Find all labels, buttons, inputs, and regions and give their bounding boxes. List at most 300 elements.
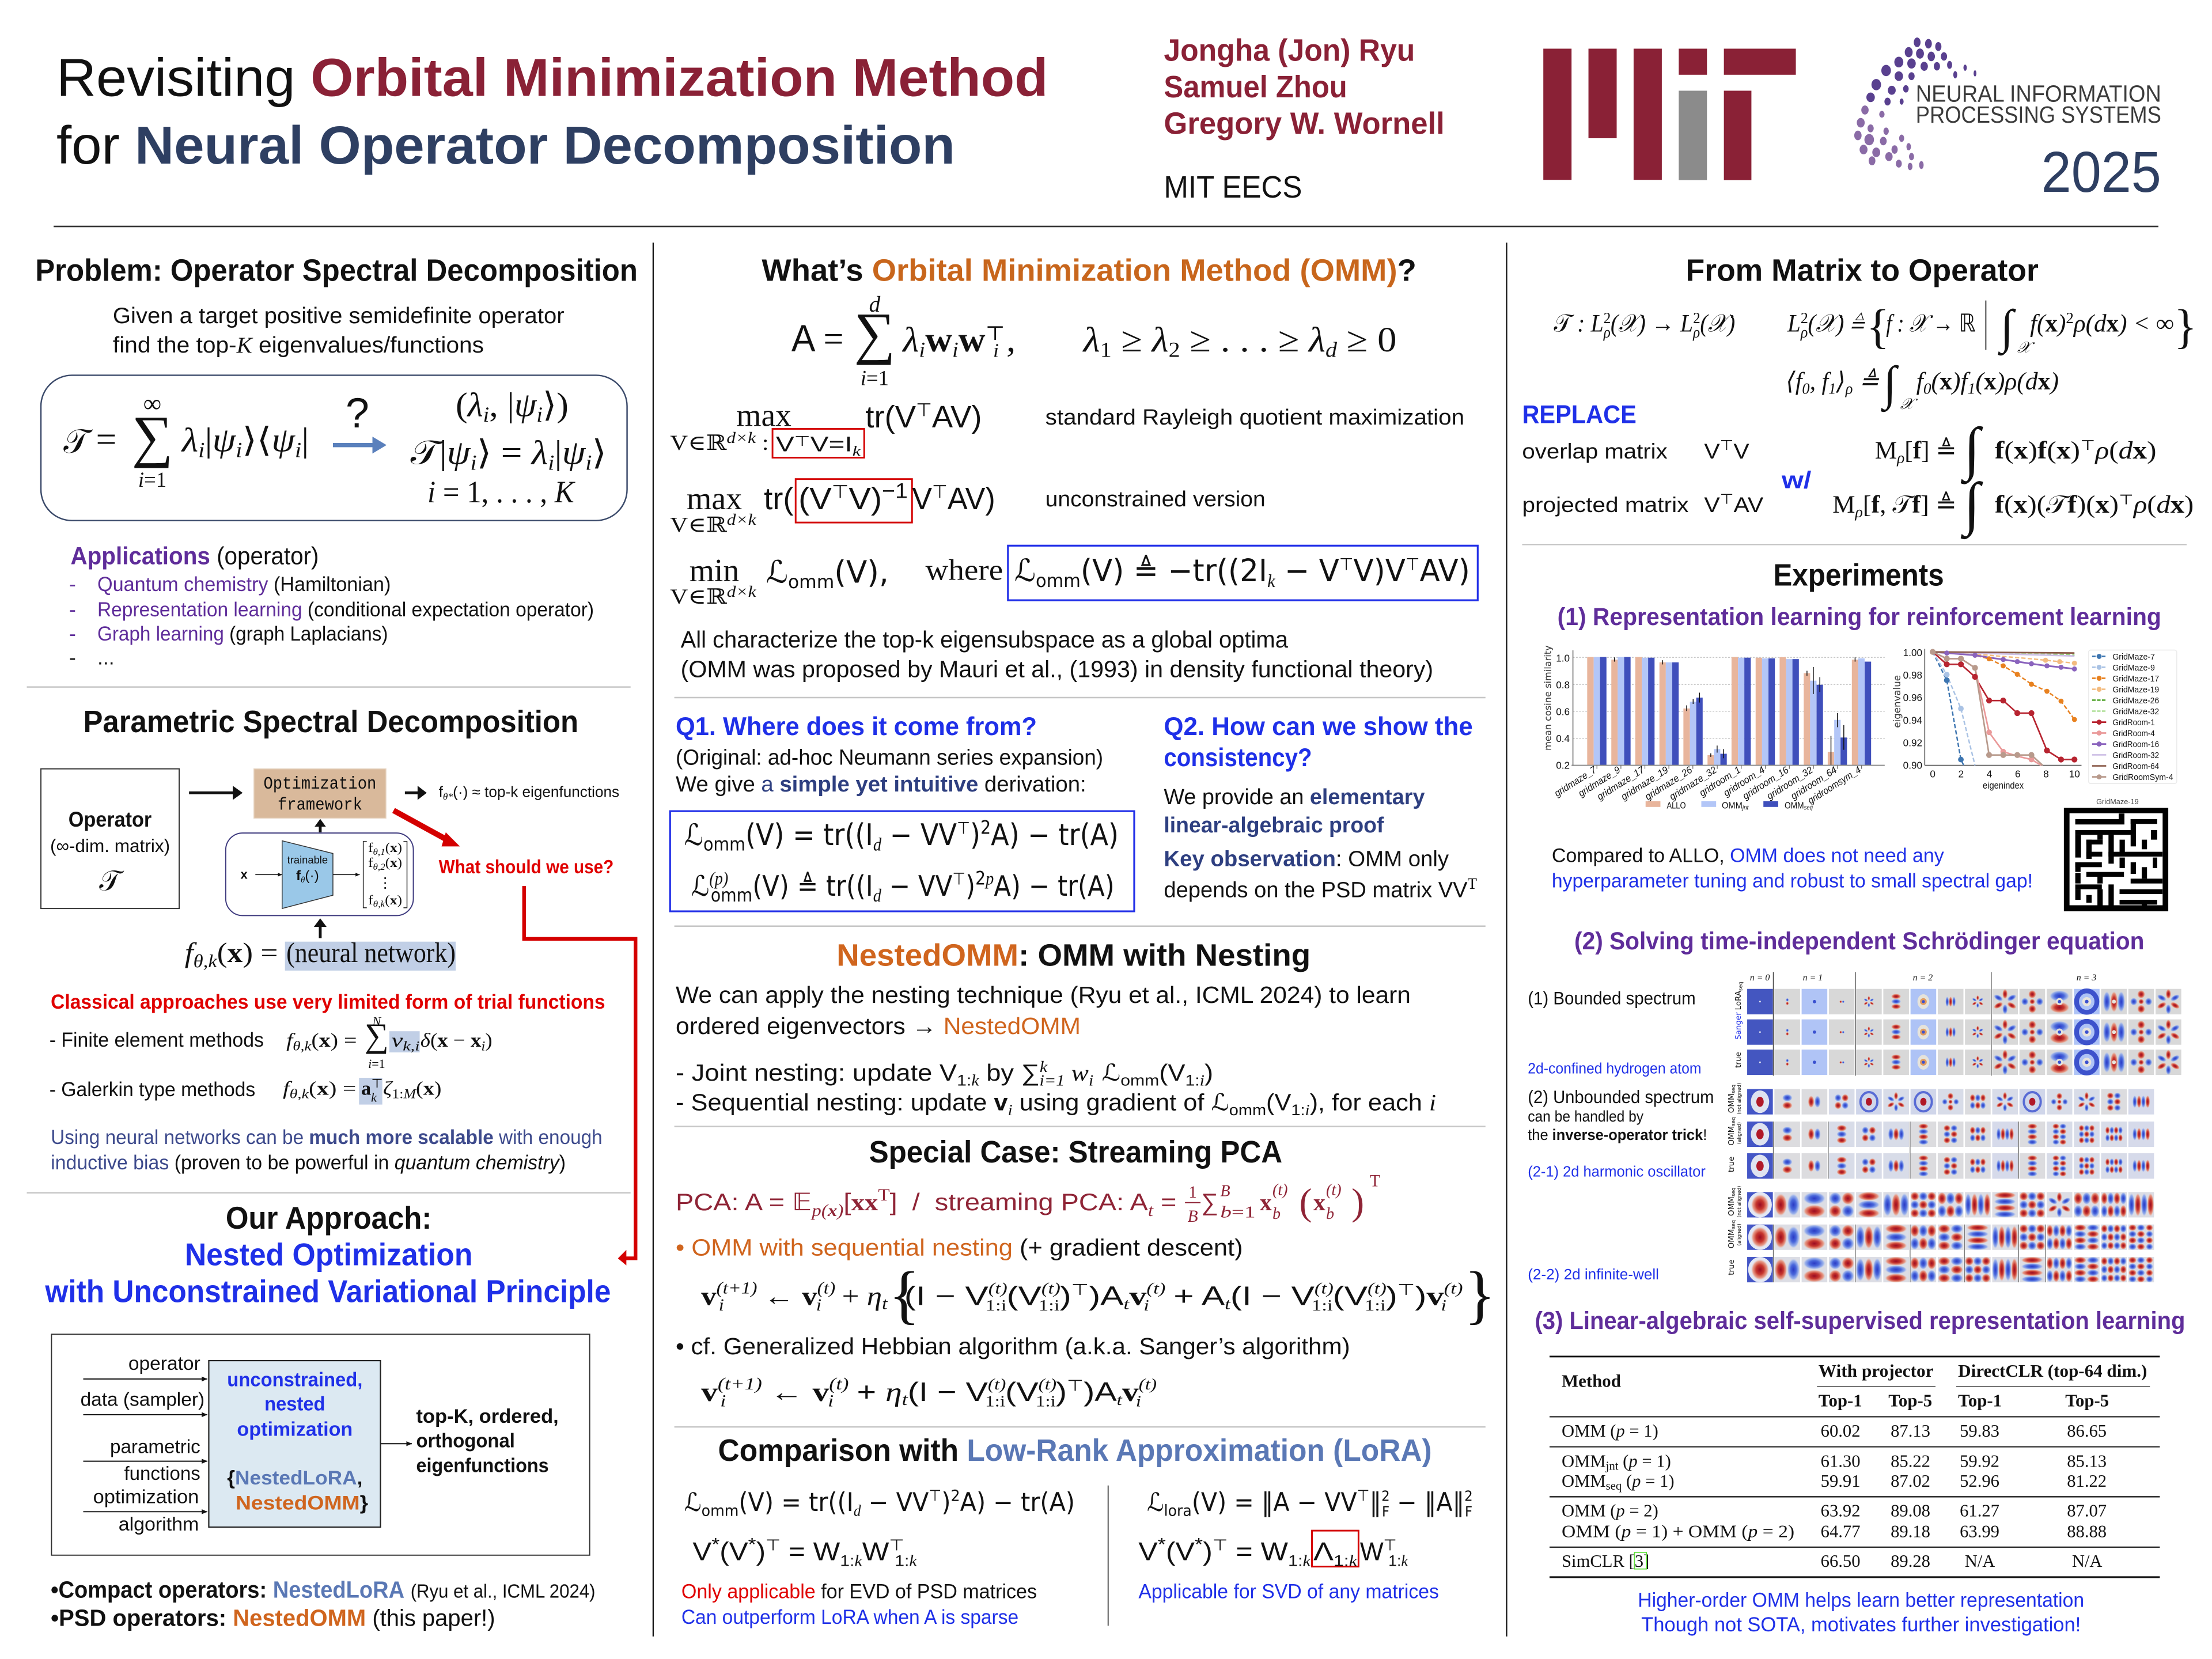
Q1 formula box: (p) bbox=[709, 869, 728, 889]
heatmap grid: infinite well bbox=[1728, 1185, 2154, 1283]
LoRA side: 1:k bbox=[1388, 1552, 1408, 1569]
OMM objective formula: ⊤ bbox=[1406, 554, 1420, 574]
line chart: eigenvalue vs eigenindex: 1.00 bbox=[1903, 647, 1922, 658]
OMM update formula: } bbox=[1464, 1259, 1495, 1331]
unconstrained formula: −1 bbox=[882, 479, 908, 502]
OMM side: (V) = tr((I bbox=[738, 1488, 854, 1517]
authors: Samuel Zhou bbox=[1164, 70, 1347, 104]
network diagram: trainable bbox=[287, 854, 328, 866]
eigendecomposition formula: w bbox=[925, 320, 952, 359]
finite element methods: f bbox=[286, 1029, 296, 1051]
eigendecomposition formula: ≥ . . . ≥ bbox=[1180, 320, 1309, 359]
OMM update formula: 1:i bbox=[986, 1297, 1006, 1314]
OMM side: 2 bbox=[951, 1487, 960, 1505]
bar chart: mean cosine similarity: 1.0 bbox=[1556, 653, 1570, 664]
operator definition: ⟨f bbox=[1786, 368, 1802, 395]
OMM objective formula: ℒ bbox=[766, 554, 789, 590]
heading: experiments: Experiments bbox=[1773, 558, 1944, 592]
line chart: eigenvalue vs eigenindex: 0.98 bbox=[1903, 669, 1922, 681]
PCA definition: x bbox=[1260, 1190, 1272, 1216]
bar chart: mean cosine similarity: gridmaze_7 bbox=[1552, 763, 1599, 799]
finite element methods bbox=[50, 1014, 493, 1071]
PCA definition: t bbox=[1148, 1202, 1154, 1220]
Q1 formula box: (V) = tr((I bbox=[745, 818, 873, 853]
OMM update formula: v bbox=[701, 1282, 717, 1311]
nesting bullets: i bbox=[1089, 1071, 1093, 1089]
LoRA side: lora bbox=[1164, 1502, 1192, 1520]
hebbian bullet: • cf. Generalized Hebbian algorithm (a.k.a. Sanger’s algorithm) bbox=[676, 1333, 1350, 1359]
schrodinger labels: (2) Unbounded spectrum bbox=[1528, 1086, 1714, 1107]
OMM objective formula: (V) ≜ −tr((2I bbox=[1081, 552, 1267, 589]
heatmap grid: hydrogen atom: Sanger bbox=[1734, 1012, 1743, 1040]
applications list: Applications (operator) bbox=[70, 543, 319, 570]
heading: Q2 bbox=[1164, 713, 1473, 772]
heatmap grid: infinite well: (not aligned) bbox=[1737, 1185, 1743, 1217]
decomposition formula box: ⟩⟨ bbox=[242, 422, 271, 459]
line chart: eigenvalue vs eigenindex: 0.92 bbox=[1903, 737, 1922, 749]
OMM update formula: v bbox=[802, 1282, 818, 1311]
hebbian formula: ) bbox=[1056, 1377, 1067, 1407]
rayleigh formula: V∈ℝ bbox=[670, 431, 718, 454]
hebbian formula: v bbox=[701, 1378, 718, 1407]
OMM update formula: ) bbox=[1415, 1281, 1426, 1310]
OMM objective formula: − V bbox=[1275, 552, 1339, 589]
results table: Top-1 bbox=[1819, 1391, 1862, 1411]
galerkin methods: k bbox=[371, 1090, 377, 1105]
galerkin methods: 1:M bbox=[392, 1087, 415, 1102]
nesting bullets: w bbox=[1065, 1060, 1089, 1086]
LoRA side: ⊤ bbox=[1384, 1536, 1397, 1554]
heatmap grid: infinite well: (aligned) bbox=[1737, 1224, 1743, 1245]
operator box bbox=[41, 769, 179, 908]
OMM side: d bbox=[854, 1502, 861, 1519]
decomposition formula box: i bbox=[295, 438, 301, 461]
LoRA side: * bbox=[1195, 1533, 1203, 1554]
OMM objective formula: V)V bbox=[1353, 552, 1406, 589]
heading: matrix to operator: From Matrix to Operator bbox=[1686, 253, 2039, 287]
results table: With projector bbox=[1819, 1361, 1934, 1381]
PCA definition: (t) bbox=[1272, 1181, 1288, 1199]
OMM update formula: i bbox=[1143, 1297, 1149, 1314]
bullets: operators: •PSD operators: NestedOMM (this paper!) bbox=[51, 1605, 495, 1631]
bar chart: mean cosine similarity: gridmaze_9 bbox=[1576, 764, 1622, 799]
flow diagram: parametric bbox=[110, 1436, 200, 1457]
schrodinger labels: can be handled by bbox=[1528, 1108, 1644, 1125]
flow diagram: algorithm bbox=[119, 1514, 199, 1535]
ALLO comparison note: Compared to ALLO, OMM does not need any bbox=[1552, 844, 1945, 866]
schrodinger labels: (2-2) 2d infinite-well bbox=[1528, 1267, 1659, 1283]
nesting bullets: omm bbox=[1229, 1101, 1266, 1119]
heatmap grid: hydrogen atom: LoRA bbox=[1734, 991, 1743, 1010]
PCA definition bbox=[676, 1172, 1380, 1226]
flow diagram: eigenfunctions bbox=[416, 1455, 549, 1477]
OMM update formula: (t+1) bbox=[717, 1279, 757, 1298]
projected matrix row: ⊤ bbox=[1720, 491, 1734, 507]
neural network formula: (x) = bbox=[217, 937, 275, 968]
network diagram: ⋮ bbox=[378, 875, 392, 891]
problem statement: Given a target positive semidefinite operator bbox=[113, 304, 565, 328]
line chart: eigenvalue vs eigenindex: 0.90 bbox=[1903, 760, 1922, 771]
operator definition: (𝒳) → L bbox=[1611, 310, 1693, 338]
applications list: Quantum chemistry (Hamiltonian) bbox=[97, 573, 391, 596]
flow diagram bbox=[51, 1334, 590, 1555]
Q1 body: (Original: ad-hoc Neumann series expansion) bbox=[676, 745, 1103, 770]
projected matrix row: M bbox=[1832, 491, 1854, 518]
operator definition: 2 bbox=[1693, 309, 1700, 327]
finite element methods: (x) = bbox=[311, 1029, 353, 1051]
galerkin methods: f bbox=[283, 1077, 293, 1099]
OMM update formula: t bbox=[1225, 1296, 1232, 1313]
Q2 body: We provide an elementary bbox=[1164, 785, 1425, 809]
eigendecomposition formula: 1 bbox=[1100, 338, 1112, 362]
finite element methods: N bbox=[372, 1014, 382, 1028]
authors: MIT EECS bbox=[1164, 170, 1302, 204]
network diagram: (x) bbox=[385, 840, 402, 855]
bar chart: mean cosine similarity: 0.4 bbox=[1556, 733, 1570, 744]
results table: SimCLR [3] bbox=[1562, 1551, 1649, 1571]
results table: seq bbox=[1606, 1479, 1622, 1493]
operator definition: (𝒳) ≜ bbox=[1808, 310, 1866, 338]
panel: problem bbox=[35, 253, 638, 669]
heatmap grid: hydrogen atom: seq bbox=[1738, 982, 1744, 991]
hebbian formula: i bbox=[720, 1392, 726, 1411]
hebbian formula: (t) bbox=[829, 1375, 849, 1393]
OMM objective formula: d×k bbox=[727, 583, 757, 600]
finite element methods: δ(x − x bbox=[421, 1029, 480, 1051]
operator definition: f : 𝒳 → ℝ bbox=[1886, 309, 1976, 338]
line chart legend: GridRoom-16 bbox=[2112, 740, 2159, 749]
eigenfunction output label: θ* bbox=[443, 791, 453, 802]
rayleigh formula: d×k bbox=[726, 429, 756, 446]
OMM update formula: v bbox=[1129, 1282, 1147, 1311]
OMM objective formula: ℒ bbox=[1014, 552, 1037, 589]
projected matrix row: ⊤ bbox=[2119, 493, 2134, 508]
nesting bullets: 1:i bbox=[1185, 1071, 1204, 1089]
overlap matrix row: ρ bbox=[2094, 437, 2109, 464]
hebbian formula: t bbox=[902, 1391, 908, 1409]
schrodinger labels: (2-1) 2d harmonic oscillator bbox=[1528, 1164, 1706, 1180]
operator definition: 0 bbox=[1802, 380, 1810, 397]
operator definition: (x)ρ(dx) bbox=[1975, 368, 2059, 395]
applications list: - bbox=[69, 598, 76, 621]
OMM update formula: (I − V bbox=[904, 1281, 969, 1310]
icon: NeurIPS logo bbox=[1854, 37, 2161, 204]
Q1 formula box: A) − tr(A) bbox=[994, 870, 1115, 903]
heading: Q1: Q1. Where does it come from? bbox=[676, 713, 1037, 741]
operator definition: 2 bbox=[1801, 309, 1808, 327]
problem statement: find the top- K eigenvalues/functions bbox=[113, 333, 484, 358]
eigendecomposition formula: i bbox=[993, 340, 999, 362]
rayleigh formula: max bbox=[736, 398, 791, 434]
OMM update formula: t bbox=[882, 1295, 888, 1313]
operator definition: , f bbox=[1810, 368, 1831, 395]
OMM update formula: v bbox=[1426, 1282, 1445, 1311]
results table: 85.22 bbox=[1891, 1451, 1930, 1471]
line chart: eigenvalue vs eigenindex: 6 bbox=[2015, 768, 2021, 779]
results table: OMM bbox=[1562, 1451, 1606, 1471]
hebbian formula: + bbox=[848, 1377, 885, 1407]
flow diagram: data (sampler) bbox=[81, 1389, 204, 1410]
OMM update formula: i bbox=[719, 1296, 724, 1315]
decomposition formula box: i bbox=[536, 403, 543, 426]
nesting bullets: i=1 bbox=[1040, 1071, 1065, 1089]
optimization framework box: Optimization bbox=[263, 775, 376, 794]
PCA definition: 1 bbox=[1188, 1183, 1197, 1202]
nesting bullets bbox=[676, 1058, 1436, 1119]
line chart legend: GridRoom-1 bbox=[2112, 718, 2155, 728]
bar chart: mean cosine similarity: gridroomsym_4 bbox=[1805, 764, 1863, 806]
projected matrix row: V bbox=[1704, 493, 1718, 517]
line chart legend: GridMaze-26 bbox=[2112, 696, 2159, 706]
heading: Q2: consistency? bbox=[1164, 744, 1312, 772]
heatmap grid: harmonic oscillator: OMM bbox=[1728, 1093, 1736, 1113]
finite element methods: v bbox=[392, 1029, 400, 1051]
nesting bullets: omm bbox=[1120, 1071, 1159, 1089]
OMM side: 1:k bbox=[840, 1552, 861, 1569]
flow diagram: {NestedLoRA , bbox=[227, 1467, 362, 1489]
neural networks note: Using neural networks can be much more scalable with enough bbox=[51, 1126, 603, 1149]
OMM objective formula: V∈ℝ bbox=[670, 585, 718, 608]
results table: 64.77 bbox=[1821, 1521, 1861, 1541]
operator definition: f(x) bbox=[2030, 310, 2066, 338]
maze image bbox=[2064, 797, 2168, 911]
operator box: (∞-dim. matrix) bbox=[50, 835, 170, 856]
bullets: operators: •Compact operators: NestedLoRA (Ryu et al., ICML 2024) bbox=[51, 1576, 595, 1603]
schrodinger labels: 2d-confined hydrogen atom bbox=[1528, 1061, 1701, 1077]
hebbian formula: (I − V bbox=[908, 1377, 988, 1407]
line chart: eigenvalue vs eigenindex: 2 bbox=[1959, 768, 1964, 779]
decomposition formula box: ψ bbox=[271, 422, 296, 459]
eigenfunction output label: f bbox=[439, 785, 443, 801]
heatmap grid: hydrogen atom bbox=[1734, 972, 2181, 1075]
PCA definition: ( bbox=[1300, 1181, 1312, 1224]
LoRA side: 1: k bbox=[1334, 1552, 1356, 1569]
operator definition: (𝒳) bbox=[1700, 310, 1735, 338]
hebbian formula: ← bbox=[761, 1377, 812, 1407]
arrow: framework to eigenfunctions bbox=[405, 786, 427, 800]
eigendecomposition formula: λ bbox=[1308, 320, 1325, 359]
bar chart: mean cosine similarity: gridroom_32 bbox=[1764, 764, 1815, 802]
projected matrix row bbox=[1522, 471, 2194, 540]
LoRA side: ⊤ bbox=[1213, 1536, 1228, 1554]
column dividers bbox=[653, 243, 1507, 1637]
applications list bbox=[69, 543, 594, 669]
PCA definition: ∑ bbox=[1201, 1188, 1218, 1215]
line chart: eigenvalue vs eigenindex: eigenindex bbox=[1983, 780, 2024, 791]
rayleigh formula: V bbox=[776, 433, 790, 456]
finite element methods: i bbox=[481, 1039, 485, 1054]
bar chart: mean cosine similarity: OMM bbox=[1785, 801, 1807, 810]
eigendecomposition formula: w bbox=[959, 320, 986, 359]
neural network formula: θ,k bbox=[194, 951, 218, 971]
OMM update formula: + bbox=[834, 1282, 867, 1311]
OMM side: 1:k bbox=[895, 1552, 916, 1569]
Q1 formula box: − VV bbox=[881, 818, 957, 853]
Q1 body: We give a simple yet intuitive derivation: bbox=[676, 772, 1086, 797]
PCA definition: [xx bbox=[843, 1188, 875, 1216]
panel: from matrix to operator bbox=[1522, 253, 2197, 540]
projected matrix row: (dx) bbox=[2147, 491, 2192, 518]
schrodinger labels: (1) Bounded spectrum bbox=[1528, 988, 1696, 1009]
heatmap grid: infinite well: seq bbox=[1731, 1220, 1737, 1229]
OMM objective formula: omm bbox=[788, 571, 834, 593]
network diagram: f bbox=[368, 840, 373, 855]
OMM side: W bbox=[862, 1538, 889, 1566]
OMM update formula: (V bbox=[1333, 1281, 1368, 1310]
nesting bullets: ℒ bbox=[1093, 1059, 1120, 1086]
line chart legend: GridRoom-64 bbox=[2112, 762, 2159, 771]
Q1 formula box: ⊤ bbox=[957, 818, 970, 838]
authors: Gregory W. Wornell bbox=[1164, 107, 1445, 141]
finite element methods: ∑ bbox=[365, 1017, 389, 1054]
network diagram: θ bbox=[301, 876, 305, 885]
OMM side: Only applicable for EVD of PSD matrices bbox=[681, 1580, 1037, 1603]
unconstrained formula: AV) bbox=[948, 482, 995, 516]
characterization text: All characterize the top-k eigensubspace as a global optima bbox=[681, 626, 1288, 653]
OMM side: ) bbox=[941, 1488, 951, 1517]
operator definition: ρ bbox=[1800, 323, 1808, 340]
OMM update formula: (t) bbox=[1146, 1280, 1165, 1297]
OMM update formula: ← bbox=[756, 1282, 802, 1311]
galerkin methods: - Galerkin type methods bbox=[50, 1078, 255, 1101]
LoRA side: = W bbox=[1228, 1538, 1288, 1566]
OMM side: * bbox=[711, 1533, 719, 1554]
operator definition: ρ bbox=[1845, 380, 1853, 397]
eigendecomposition formula: λ bbox=[1151, 320, 1169, 359]
LoRA side: * bbox=[1158, 1533, 1166, 1554]
network diagram: (x) bbox=[385, 893, 402, 908]
bar chart: mean cosine similarity: mean cosine similarity bbox=[1543, 645, 1554, 751]
nesting bullets: k bbox=[1040, 1058, 1048, 1075]
unconstrained formula: ⊤ bbox=[832, 481, 849, 502]
decomposition formula box: | bbox=[301, 422, 309, 459]
PCA definition: B bbox=[1188, 1207, 1198, 1226]
decomposition formula box: ∑ bbox=[132, 404, 173, 468]
projected matrix row: ∫ bbox=[1960, 471, 1983, 540]
rayleigh formula: ⊤ bbox=[794, 434, 810, 449]
line chart: eigenvalue vs eigenindex: 0.96 bbox=[1903, 692, 1922, 703]
LoRA side: ) bbox=[1203, 1538, 1213, 1566]
operator definition: 𝒯 : L bbox=[1554, 310, 1606, 338]
panel: streaming PCA bbox=[676, 1135, 1495, 1411]
OMM side bbox=[681, 1487, 1075, 1628]
OMM objective formula: ⊤ bbox=[1339, 554, 1353, 574]
bar chart: mean cosine similarity bbox=[1543, 645, 1885, 812]
line chart legend: GridRoomSym-4 bbox=[2112, 773, 2173, 782]
heatmap grid: infinite well: seq bbox=[1731, 1188, 1737, 1196]
rayleigh formula: tr(V bbox=[865, 400, 915, 434]
decomposition formula box: i bbox=[470, 451, 477, 475]
OMM update formula: (V bbox=[1006, 1281, 1041, 1310]
characterization text bbox=[681, 626, 1433, 683]
panel: Q2 bbox=[1164, 713, 1477, 903]
table takeaway bbox=[1638, 1588, 2084, 1636]
overlap matrix row: ⊤ bbox=[2080, 438, 2096, 453]
optimization framework box bbox=[254, 769, 386, 818]
unconstrained formula: V bbox=[912, 482, 933, 516]
OMM update formula: t bbox=[1124, 1296, 1130, 1313]
operator definition: ρ bbox=[1692, 323, 1700, 340]
eigendecomposition formula: λ bbox=[1082, 320, 1100, 359]
PCA definition: ) bbox=[1351, 1181, 1364, 1224]
OMM update formula: 1:i bbox=[1312, 1297, 1333, 1314]
eigendecomposition formula bbox=[791, 292, 1396, 390]
operator definition: ≜ bbox=[1853, 368, 1880, 395]
title bbox=[56, 48, 1048, 175]
LoRA side: ‖ bbox=[1370, 1488, 1381, 1517]
Q1 formula box: omm bbox=[711, 884, 752, 906]
results table: 60.02 bbox=[1821, 1421, 1861, 1441]
subheading: schrodinger equation: (2) Solving time-independent Schrödinger equation bbox=[1574, 927, 2144, 955]
operator definition: ∫ bbox=[1998, 301, 2017, 356]
line chart legend: GridMaze-17 bbox=[2112, 675, 2159, 684]
line chart: eigenvalue vs eigenindex: 4 bbox=[1987, 768, 1993, 779]
neural networks note bbox=[51, 1126, 603, 1174]
table takeaway: Higher-order OMM helps learn better representation bbox=[1638, 1588, 2084, 1611]
PCA definition: T bbox=[878, 1186, 890, 1205]
hebbian formula: (t) bbox=[1139, 1376, 1157, 1393]
galerkin methods: a bbox=[361, 1077, 371, 1099]
panel: our approach bbox=[44, 1200, 611, 1631]
neural network formula bbox=[185, 937, 456, 971]
operator definition bbox=[1554, 301, 2197, 412]
operator definition: 2 bbox=[2066, 309, 2074, 327]
hebbian formula: v bbox=[812, 1378, 830, 1407]
bar chart: mean cosine similarity: OMM bbox=[1722, 801, 1744, 810]
OMM objective formula: min bbox=[690, 553, 739, 589]
Q1 formula box: (V) ≜ tr((I bbox=[752, 870, 873, 903]
finite element methods: θ,k bbox=[293, 1039, 312, 1054]
panel: comparison with LoRA bbox=[681, 1433, 1473, 1628]
Q1 formula box: A) − tr(A) bbox=[991, 818, 1119, 853]
galerkin methods: ζ bbox=[383, 1077, 393, 1099]
results table: 59.83 bbox=[1960, 1421, 1999, 1441]
decomposition formula box: ⟩) bbox=[543, 386, 569, 423]
LoRA side: ⊤ bbox=[1357, 1487, 1370, 1505]
results table: 66.50 bbox=[1821, 1551, 1861, 1571]
Q1 formula box: − VV bbox=[881, 870, 953, 903]
results table: 59.92 bbox=[1960, 1451, 1999, 1471]
PCA definition: PCA: A = 𝔼 bbox=[676, 1188, 797, 1215]
results table: 61.30 bbox=[1821, 1451, 1861, 1471]
hebbian formula: )A bbox=[1084, 1377, 1117, 1407]
arrow: red what should we use bbox=[393, 810, 460, 846]
LoRA side: (V bbox=[1166, 1538, 1195, 1566]
overlap matrix row: ∫ bbox=[1960, 416, 1983, 484]
decomposition formula box: λ bbox=[181, 422, 198, 459]
what should we use label: What should we use? bbox=[439, 857, 613, 878]
unconstrained formula: V∈ℝ bbox=[670, 513, 718, 536]
nesting bullets: (V bbox=[1266, 1089, 1291, 1115]
bar chart: mean cosine similarity: gridmaze_26 bbox=[1643, 764, 1694, 802]
eigendecomposition formula: 2 bbox=[1169, 338, 1180, 362]
panel: nested OMM bbox=[676, 938, 1436, 1119]
overlap matrix row: M bbox=[1875, 437, 1897, 464]
results table: Top-1 bbox=[1958, 1391, 2002, 1411]
rayleigh formula: : bbox=[756, 431, 769, 454]
nesting bullets: (V bbox=[1159, 1059, 1185, 1086]
OMM side: Can outperform LoRA when A is sparse bbox=[681, 1605, 1018, 1628]
heading: Q2: Q2. How can we show the bbox=[1164, 713, 1473, 741]
PCA definition: T bbox=[1370, 1172, 1380, 1191]
operator definition: 𝒳 bbox=[2017, 339, 2035, 356]
LoRA side: Applicable for SVD of any matrices bbox=[1138, 1580, 1439, 1603]
LoRA side: V bbox=[1138, 1538, 1156, 1566]
OMM side: omm bbox=[702, 1502, 738, 1520]
OMM side: (V bbox=[719, 1538, 748, 1566]
flow diagram: optimization bbox=[93, 1486, 199, 1508]
heatmap grid: infinite well: true bbox=[1728, 1259, 1736, 1275]
